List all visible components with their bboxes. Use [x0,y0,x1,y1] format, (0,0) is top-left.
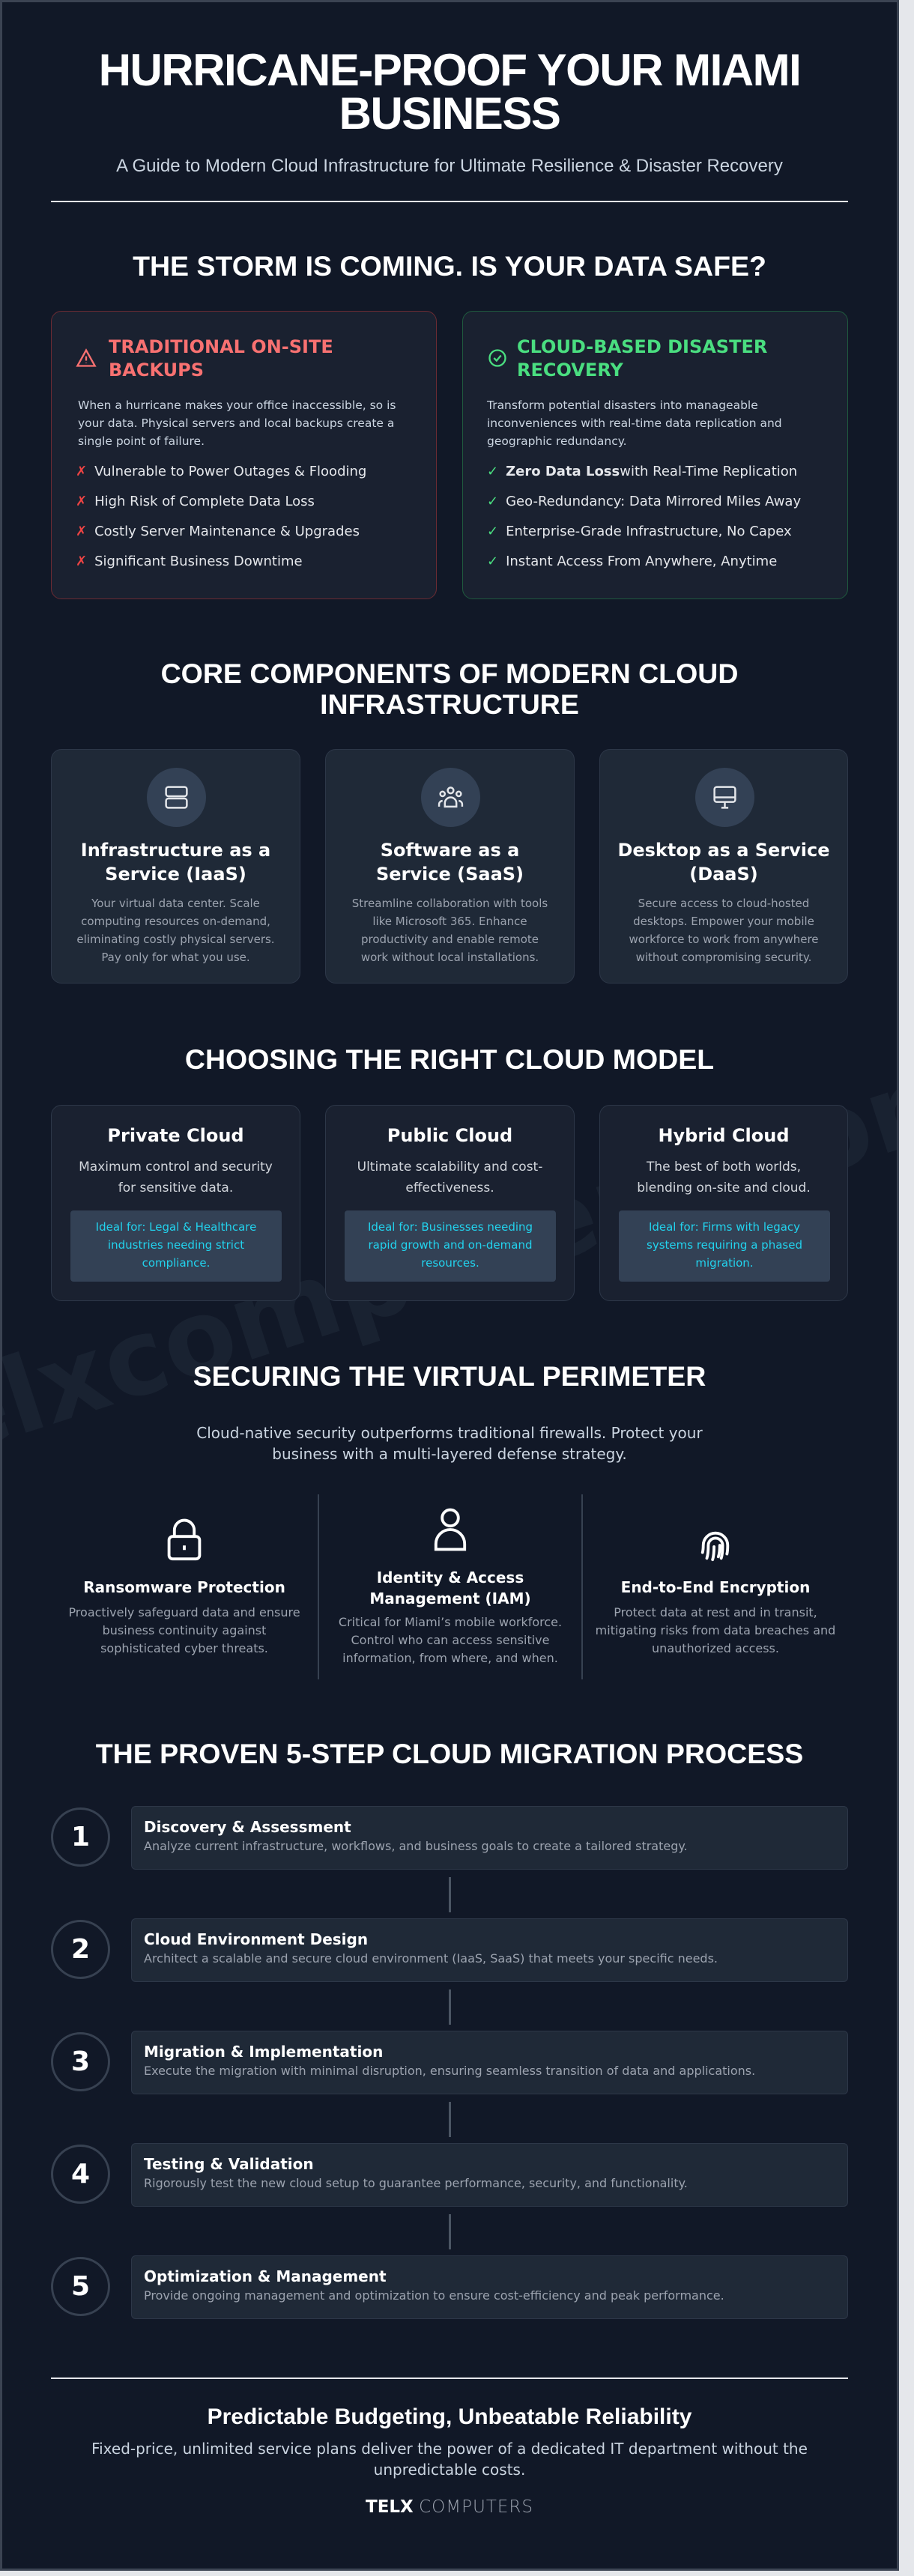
title [369,1569,531,1607]
title: Infrastructure as a [81,840,270,861]
text: unauthorized access. [652,1641,779,1655]
list: benefits [487,464,801,569]
text: like Microsoft 365. Enhance [372,915,527,928]
text: The best of both worlds, [647,1160,801,1175]
heading: traditional: BACKUPS [109,360,204,381]
icon: check [488,349,506,367]
panel: DaaS [599,749,848,984]
step 2: Cloud Environment Design [144,1930,368,1948]
heading: core components: INFRASTRUCTURE [320,688,579,720]
step 2: Architect a scalable and secure cloud environment (IaaS, SaaS) that meets your specific needs. [144,1951,718,1966]
text: business continuity against [103,1623,266,1637]
subtitle: A Guide to Modern Cloud Infrastructure for Ultimate Resilience & Disaster Recovery [116,156,783,176]
icon: warning [76,348,97,367]
step 3 [51,2031,848,2094]
list: benefits: ✓ Zero Data Losswith Real-Time Replication [487,464,797,479]
text: blending on-site and cloud. [637,1181,811,1195]
text: sophisticated cyber threats. [100,1641,268,1655]
footer heading: Predictable Budgeting, Unbeatable Reliability [208,2404,691,2429]
heading: security: SECURING THE VIRTUAL PERIMETER [193,1360,706,1392]
footer text: Fixed-price, unlimited service plans deliver the power of a dedicated IT department without the unpredictable costs. [91,2440,808,2479]
step 1 [51,1806,848,1870]
step 2 [51,1918,848,1982]
step 3: 3 [71,2046,90,2077]
heading: traditional: TRADITIONAL ON-SITE [109,336,333,357]
heading: core components [161,658,738,720]
feature: encryption [596,1531,835,1655]
text: Streamline collaboration with tools [352,897,548,910]
text: Critical for Miami’s mobile workforce. [339,1615,562,1629]
feature: IAM [339,1509,562,1665]
text: computing resources on-demand, [81,915,270,928]
text: security intro: Cloud-native security outperforms traditional firewalls. Protect your [196,1424,703,1442]
heading: cloud: CLOUD-BASED DISASTER [517,336,767,357]
title [617,840,830,885]
step 3: Execute the migration with minimal disruption, ensuring seamless transition of data and applications. [144,2064,755,2078]
list: benefits: ✓ Geo-Redundancy: Data Mirrored Miles Away [487,494,801,509]
text: workforce to work from anywhere [629,933,819,946]
text [339,1615,562,1665]
callout: Ideal for: Firms with legacy systems requiring a phased migration. [647,1220,802,1270]
text: productivity and enable remote [361,933,539,946]
text [76,897,275,964]
callout [619,1210,830,1282]
callout [345,1210,556,1282]
logo: TELX COMPUTERS [366,2497,533,2517]
heading: traditional [109,336,333,381]
title: Identity & Access [377,1569,524,1586]
list: benefits: ✓ Instant Access From Anywhere, Anytime [487,554,777,569]
panel: cloud DR [462,311,848,599]
icon: lock [168,1519,201,1561]
text: security intro [196,1424,703,1463]
icon: users [421,768,480,827]
step 2: 2 [71,1934,90,1965]
text [352,897,548,964]
panel: hybrid cloud [599,1105,848,1301]
list: risks [76,464,366,569]
step 1: Analyze current infrastructure, workflows, and business goals to create a tailored strategy. [144,1839,688,1853]
text: Your virtual data center. Scale [91,897,260,910]
step 4: Rigorously test the new cloud setup to guarantee performance, security, and functionality. [144,2176,688,2190]
text: without compromising security. [636,951,811,964]
panel: public cloud [325,1105,575,1301]
text: effectiveness. [405,1181,494,1195]
panel: IaaS [51,749,300,984]
text: mitigating risks from data breaches and [596,1623,835,1637]
title: Private Cloud [107,1125,244,1146]
list: risks: ✗ Significant Business Downtime [76,554,303,569]
title [376,840,524,885]
heading: core components: CORE COMPONENTS OF MODERN CLOUD [161,658,738,689]
step 5: Optimization & Management [144,2267,387,2285]
heading: migration process: THE PROVEN 5-STEP CLOUD MIGRATION PROCESS [96,1738,803,1769]
step 5 [51,2255,848,2319]
text [629,897,819,964]
text: security intro: business with a multi-layered defense strategy. [272,1445,627,1463]
title: Public Cloud [387,1125,512,1146]
text: Transform potential disasters into manageable inconveniences with real-time data replication and geographic redundancy. [487,398,782,448]
title: Software as a [381,840,519,861]
text: Ultimate scalability and cost- [357,1160,542,1175]
step 5: Provide ongoing management and optimization to ensure cost-efficiency and peak performance. [144,2288,724,2303]
panel: private cloud [51,1105,300,1301]
panel: traditional backups [51,311,437,599]
title: HURRICANE-PROOF YOUR MIAMI [99,45,800,95]
title: Service (SaaS) [376,864,524,885]
list: benefits: ✓ Enterprise-Grade Infrastructure, No Capex [487,524,792,539]
text: work without local installations. [361,951,539,964]
step 4 [51,2143,848,2207]
text: Protect data at rest and in transit, [614,1605,817,1619]
icon: desktop [695,768,754,827]
list: risks: ✗ Costly Server Maintenance & Upgrades [76,524,360,539]
title: BUSINESS [339,88,560,139]
title: Service (IaaS) [105,864,246,885]
heading: cloud [517,336,767,381]
text: Proactively safeguard data and ensure [68,1605,300,1619]
text [596,1605,835,1655]
text: eliminating costly physical servers. [76,933,275,946]
title: End-to-End Encryption [621,1578,810,1596]
text: desktops. Empower your mobile [633,915,814,928]
title [99,45,800,139]
feature: ransomware [68,1519,300,1655]
callout: Ideal for: Legal & Healthcare industries needing strict compliance. [96,1220,256,1270]
text [357,1160,542,1195]
step 4: Testing & Validation [144,2155,314,2173]
callout: Ideal for: Businesses needing rapid growth and on-demand resources. [368,1220,533,1270]
title: Ransomware Protection [83,1578,285,1596]
text [637,1160,811,1195]
title: (DaaS) [689,864,758,885]
heading: storm: THE STORM IS COMING. IS YOUR DATA SAFE? [133,250,766,282]
text: Maximum control and security [79,1160,273,1175]
title: Management (IAM) [369,1589,531,1607]
list: risks: ✗ High Risk of Complete Data Loss [76,494,315,509]
step 1: 1 [71,1822,90,1852]
title [81,840,270,885]
list: risks: ✗ Vulnerable to Power Outages & Flooding [76,464,366,479]
text: Pay only for what you use. [101,951,250,964]
text: When a hurricane makes your office inaccessible, so is your data. Physical servers and local backups create a single point of failure. [78,398,396,448]
step 3: Migration & Implementation [144,2043,383,2061]
panel: SaaS [325,749,575,984]
icon: fingerprint [701,1531,730,1561]
step 4: 4 [71,2159,90,2189]
icon: user [435,1509,466,1551]
text: information, from where, and when. [342,1651,558,1665]
heading: cloud model: CHOOSING THE RIGHT CLOUD MODEL [185,1043,714,1075]
step 5: 5 [71,2271,90,2302]
heading: cloud: RECOVERY [517,360,623,381]
callout [70,1210,282,1282]
title: Hybrid Cloud [658,1125,790,1146]
text: Control who can access sensitive [351,1633,549,1647]
title: Desktop as a Service [617,840,830,861]
step 1: Discovery & Assessment [144,1818,351,1836]
text: for sensitive data. [118,1181,233,1195]
text [79,1160,273,1195]
icon: server [147,768,206,827]
text [68,1605,300,1655]
text: Secure access to cloud-hosted [638,897,809,910]
